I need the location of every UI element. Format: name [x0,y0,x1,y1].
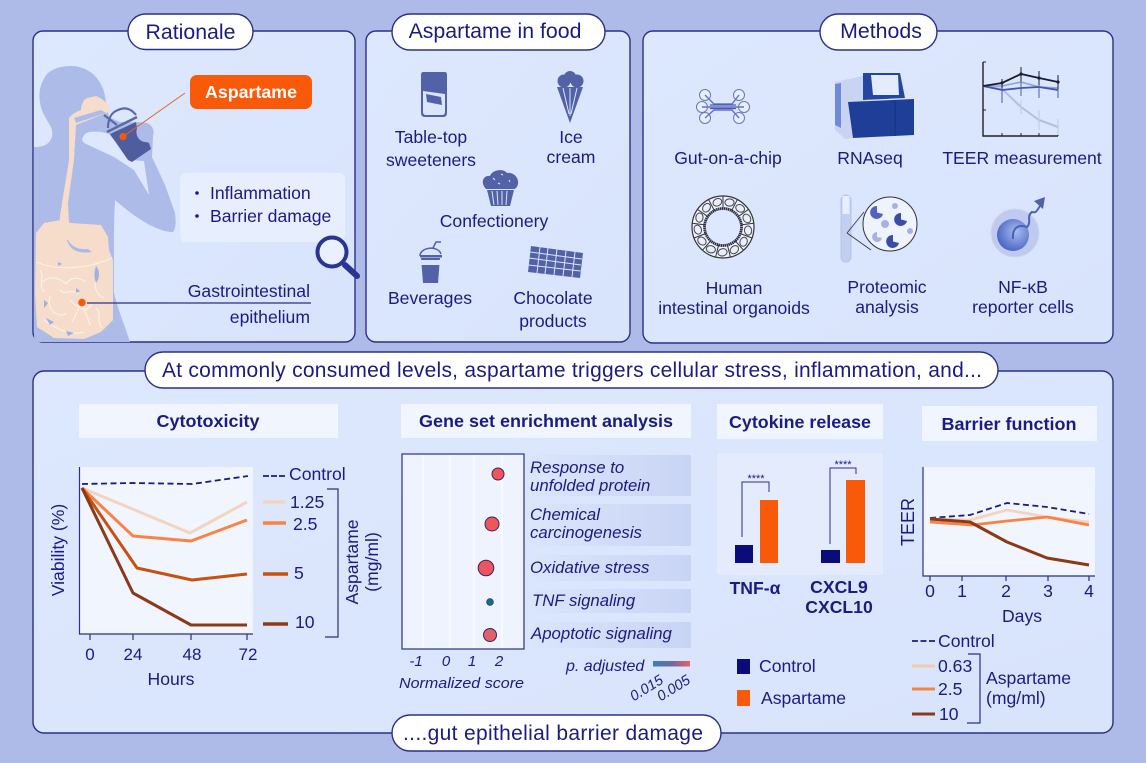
legend: barrier function: Control [938,631,995,651]
chart: barrier function [898,406,1097,626]
chart: gene set enrichment analysis: TNF signaling [532,591,636,610]
chart: cytokine release: **** [747,473,765,485]
legend: cytokine: Control [759,656,816,676]
legend: cytotoxicity [263,464,382,637]
icon: test tube and proteins [841,195,917,262]
icon: magnifier [318,238,357,276]
legend: cytotoxicity: Control [289,464,346,484]
legend: barrier function: 2.5 [938,679,963,699]
chart: cytokine release: **** [834,459,852,471]
chart: gene set enrichment analysis: Chemical [530,505,601,524]
heading: rationale [128,14,253,50]
chart: barrier function: TEER [898,498,918,546]
legend: cytotoxicity: 5 [294,563,304,583]
label: reporter cells [972,297,1074,317]
chart: cytokine release: CXCL10 [805,597,873,617]
chart: gene set enrichment analysis: 0 [442,653,451,670]
heading: barrier function: Barrier function [942,414,1076,434]
chart: cytotoxicity: Hours [148,669,195,689]
chart: gene set enrichment analysis [399,404,691,692]
icon: intestinal organoid [690,194,755,260]
heading: results top banner: At commonly consumed levels, aspartame triggers cellular stress, inflammation, and... [162,359,982,382]
heading: gene set enrichment [401,404,691,438]
legend: p adjusted: 0.015 [627,672,667,705]
chart: gene set enrichment analysis: Apoptotic signaling [530,624,673,643]
chart: gene set enrichment analysis: 1 [468,653,476,670]
chart: gene set enrichment analysis: Normalized score [399,675,524,692]
panel: aspartame in food [366,14,630,342]
label: NF-κB [998,277,1048,297]
gastrointestinal epithelium label: epithelium [230,307,310,327]
heading: barrier function [922,406,1097,441]
label: Chocolate [513,288,593,308]
icon: gut on a chip [696,90,750,124]
heading: results top banner [145,352,998,388]
legend: cytotoxicity: (mg/ml) [362,532,382,592]
label: analysis [855,297,919,317]
chart: cytokine release: CXCL9 [810,577,868,597]
legend: cytotoxicity: 1.25 [290,492,324,512]
chart: cytotoxicity [48,404,338,689]
label: Human [706,278,762,298]
gastrointestinal epithelium label: Gastrointestinal [188,281,310,301]
legend: barrier function: (mg/ml) [986,688,1046,708]
legend: barrier function [912,631,1071,724]
chart: cytokine release [717,404,883,617]
chart: gene set enrichment analysis: carcinogenesis [530,523,643,542]
label: Confectionery [440,211,548,231]
gastrointestinal epithelium label [78,281,311,327]
label: products [519,311,587,331]
chart: gene set enrichment analysis: 2 [494,653,504,670]
chart: barrier function: 1 [957,581,967,601]
chart: gene set enrichment analysis: -1 [409,653,423,670]
label: Beverages [388,288,472,308]
heading: cytotoxicity: Cytotoxicity [156,411,260,431]
chart: gene set enrichment analysis: Response to [530,458,624,477]
heading: rationale: Rationale [146,20,235,44]
icon: muffin [483,170,518,206]
digestive tract [35,96,113,339]
chart: cytotoxicity: 72 [239,645,257,664]
label: Ice [559,127,583,147]
icon: TEER mini chart [983,62,1060,136]
chart: barrier function: 0 [925,581,935,601]
panel: methods [643,14,1113,343]
panel: rationale [33,14,357,342]
legend: cytotoxicity: 2.5 [293,514,318,534]
label: TEER measurement [942,148,1102,168]
heading: methods [820,14,937,50]
heading: aspartame in food: Aspartame in food [409,19,581,43]
chart: barrier function: Days [1002,606,1042,626]
chart: gene set enrichment analysis: unfolded protein [530,476,650,495]
callout line [124,93,185,136]
aspartame label [190,75,312,109]
effects list [180,173,345,242]
heading: results bottom banner [392,715,721,751]
heading: aspartame in food [392,14,605,50]
legend: cytotoxicity: Aspartame [342,519,362,605]
heading: gene set enrichment: Gene set enrichment analysis [419,411,673,431]
chart: cytokine release: TNF-α [730,578,781,598]
chart: barrier function: 4 [1084,581,1094,601]
legend: p adjusted: 0.005 [654,672,694,705]
legend: barrier function: Aspartame [986,668,1071,688]
icon: beverage cup [420,242,442,283]
icon: ice cream [557,71,584,123]
chart: gene set enrichment analysis: Oxidative stress [530,558,650,577]
label: intestinal organoids [658,298,810,318]
chart: cytotoxicity: 24 [124,645,142,664]
heading: cytokine release: Cytokine release [729,412,871,432]
chart: cytotoxicity: 48 [183,645,201,664]
legend: cytokine: Aspartame [761,688,846,708]
effects list: Barrier damage [210,206,331,226]
label: RNAseq [837,148,903,168]
label: Proteomic [847,277,927,297]
legend: p adjusted: p. adjusted [565,658,645,675]
label: Gut-on-a-chip [674,148,782,168]
silhouette of a person drinking [34,66,176,342]
icon: aspartame drink [104,108,153,162]
icon: sweetener jar [421,72,447,117]
chart: barrier function: 2 [1001,581,1011,601]
dot [119,133,127,140]
legend: cytokine [737,656,846,708]
legend: barrier function: 0.63 [938,656,972,676]
chart: cytotoxicity: Viability (%) [48,504,68,596]
chart: barrier function: 3 [1043,581,1053,601]
chart: cytotoxicity: 0 [85,645,95,664]
panel: results [33,352,1113,751]
label: Table-top [395,127,467,147]
icon: chocolate bar [528,246,583,278]
icon: reporter cell [991,197,1045,257]
label: sweeteners [386,150,476,170]
label: cream [547,147,595,167]
icon: RNAseq sequencer [835,73,914,139]
aspartame label: Aspartame [205,82,297,102]
effects list: Inflammation [210,183,311,203]
heading: cytokine release [717,404,883,439]
legend: cytotoxicity: 10 [295,612,315,632]
heading: results bottom banner: ....gut epithelial barrier damage [403,722,703,745]
heading: cytotoxicity [79,404,338,438]
legend: p adjusted [565,658,694,705]
legend: barrier function: 10 [939,704,959,724]
heading: methods: Methods [840,19,922,43]
